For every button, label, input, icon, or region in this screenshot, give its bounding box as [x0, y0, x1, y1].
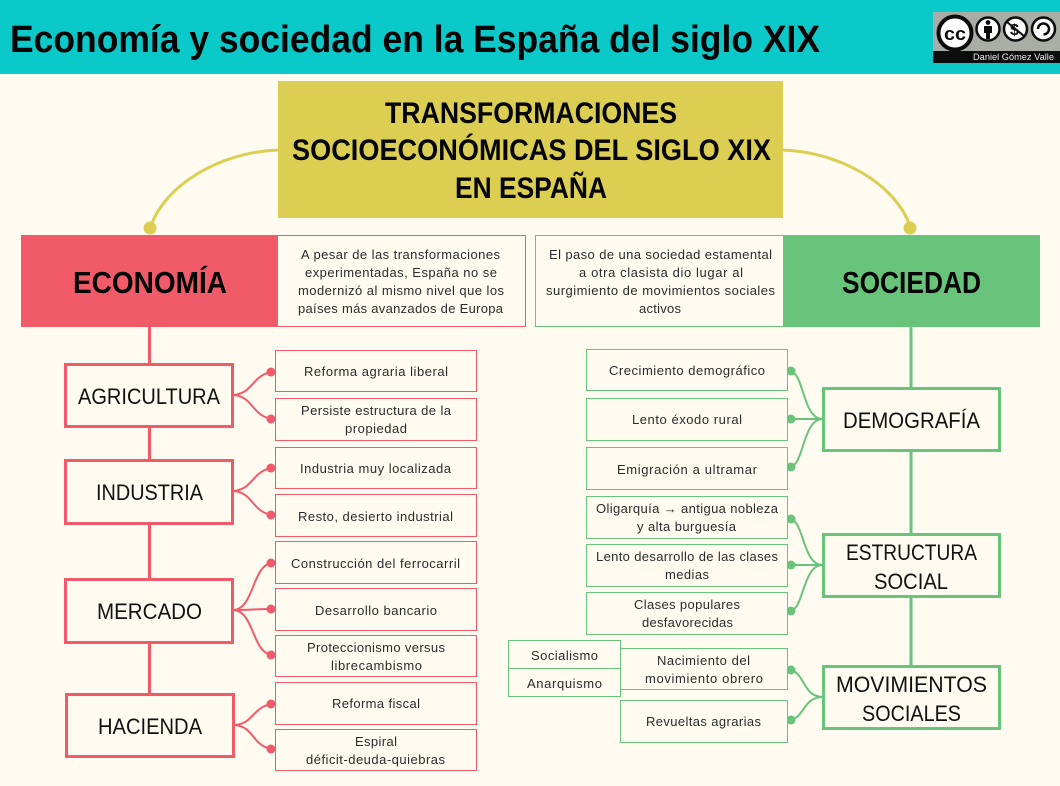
node: hacienda: HACIENDA [98, 714, 202, 739]
item: proteccionismo [276, 636, 476, 676]
connectors: estructura social [786, 514, 822, 616]
item: oligarquía [586, 496, 788, 538]
item: clases populares: Clases populares [634, 597, 740, 612]
branch: demografía [586, 350, 1000, 490]
heading: economía: ECONOMÍA [73, 265, 227, 300]
text block: sociedad summary: a otra clasista dio lugar al [579, 265, 743, 280]
trunk: economía [148, 327, 151, 694]
title: Economía y sociedad en la España del siglo XIX [10, 19, 821, 61]
item: desierto industrial: Resto, desierto industrial [298, 509, 453, 524]
central heading box: TRANSFORMACIONES [385, 97, 677, 130]
item: emigración: Emigración a ultramar [617, 462, 758, 477]
icon: creative commons license badge: cc [944, 24, 966, 44]
item: oligarquía: y alta burguesía [637, 519, 737, 534]
item: estructura de la propiedad: Persiste estructura de la [301, 403, 452, 418]
connectors: mercado [234, 558, 276, 660]
node: agricultura: AGRICULTURA [78, 384, 220, 409]
item: socialismo [508, 640, 620, 668]
item: anarquismo: Anarquismo [527, 676, 602, 691]
item: clases medias [586, 544, 788, 586]
item: éxodo rural: Lento éxodo rural [632, 412, 742, 427]
item: estructura de la propiedad [276, 398, 476, 440]
branch: estructura social [586, 496, 1000, 634]
item: clases populares [586, 592, 788, 634]
node: demografía [824, 388, 1000, 450]
heading: economía [21, 235, 277, 327]
item: movimiento obrero: movimiento obrero [645, 671, 763, 686]
connectors: agricultura [234, 368, 276, 424]
central heading box [278, 81, 783, 218]
connectors: movimientos sociales [786, 666, 822, 724]
item: industria localizada [276, 448, 476, 488]
item: crecimiento demográfico [586, 350, 788, 390]
item: movimiento obrero [620, 648, 788, 690]
text block: sociedad summary: activos [639, 301, 682, 316]
item: desarrollo bancario: Desarrollo bancario [315, 603, 437, 618]
item: proteccionismo: Proteccionismo versus [307, 640, 446, 655]
trunk: sociedad [910, 327, 912, 666]
item: reforma fiscal [276, 682, 476, 724]
item: anarquismo [508, 668, 620, 696]
item: reforma fiscal: Reforma fiscal [332, 696, 420, 711]
item: estructura de la propiedad: propiedad [345, 421, 407, 436]
node: estructura social: ESTRUCTURA [846, 540, 977, 565]
item: ferrocarril [276, 542, 476, 584]
connectors: industria [234, 464, 276, 520]
item: espiral déficit: déficit-deuda-quiebras [306, 752, 446, 767]
icon: creative commons license badge: Daniel Gómez Valle [973, 52, 1054, 63]
text block: economía summary: experimentadas, España no se [305, 265, 497, 280]
item: clases populares: desfavorecidas [642, 615, 734, 630]
item: emigración [586, 448, 788, 490]
item: socialismo: Socialismo [531, 648, 598, 663]
node: demografía: DEMOGRAFÍA [843, 408, 980, 433]
icon: creative commons license badge: $ [1010, 22, 1019, 39]
node: movimientos sociales [824, 666, 1000, 728]
item: desierto industrial [276, 494, 476, 536]
node: estructura social: SOCIAL [874, 569, 948, 594]
item: industria localizada: Industria muy localizada [300, 461, 452, 476]
node: industria: INDUSTRIA [96, 480, 203, 505]
branch: industria [66, 448, 476, 536]
node: movimientos sociales: MOVIMIENTOS [836, 672, 987, 697]
item: ferrocarril: Construcción del ferrocarril [291, 556, 460, 571]
text block: economía summary: países más avanzados de Europa [298, 301, 504, 316]
text block: sociedad summary: El paso de una sociedad estamental [549, 247, 772, 262]
branch: mercado [66, 542, 476, 676]
item: éxodo rural [586, 398, 788, 440]
connectors: hacienda [235, 700, 276, 754]
item: desarrollo bancario [276, 588, 476, 630]
item: movimiento obrero: Nacimiento del [657, 653, 750, 668]
node: agricultura [66, 364, 232, 426]
item: reforma agraria: Reforma agraria liberal [304, 364, 448, 379]
heading: sociedad [783, 235, 1040, 327]
text block: economía summary [278, 236, 526, 326]
text block: economía summary: modernizó al mismo nivel que los [298, 283, 504, 298]
connector: centre to economía [144, 150, 278, 234]
connector: centre to sociedad [783, 150, 916, 234]
item: clases medias: Lento desarrollo de las clases [596, 549, 778, 564]
node: industria [66, 460, 232, 524]
item: clases medias: medias [665, 567, 710, 582]
node: mercado: MERCADO [97, 599, 202, 624]
node: estructura social [824, 534, 1000, 596]
item: revueltas agrarias [620, 700, 788, 742]
text block: economía summary: A pesar de las transformaciones [301, 247, 500, 262]
central heading box: SOCIOECONÓMICAS DEL SIGLO XIX [292, 133, 771, 167]
branch: hacienda [66, 682, 476, 770]
item: espiral déficit [276, 730, 476, 770]
branch: movimientos sociales [508, 640, 1000, 742]
branch: agricultura [66, 350, 476, 440]
item: oligarquía: Oligarquía → antigua nobleza [596, 501, 779, 516]
node: mercado [66, 580, 232, 642]
node: movimientos sociales: SOCIALES [862, 701, 961, 726]
item: crecimiento demográfico: Crecimiento demográfico [609, 363, 765, 378]
item: revueltas agrarias: Revueltas agrarias [646, 714, 762, 729]
icon: creative commons license badge [933, 12, 1060, 63]
node: hacienda [66, 694, 234, 756]
header band [0, 0, 1060, 74]
heading: sociedad: SOCIEDAD [842, 265, 981, 300]
item: espiral déficit: Espiral [355, 734, 397, 749]
item: proteccionismo: librecambismo [331, 658, 422, 673]
text block: sociedad summary [536, 236, 784, 326]
connectors: demografía [786, 366, 822, 472]
central heading box: EN ESPAÑA [455, 171, 607, 205]
item: reforma agraria [276, 350, 476, 392]
text block: sociedad summary: surgimiento de movimientos sociales [546, 283, 776, 298]
